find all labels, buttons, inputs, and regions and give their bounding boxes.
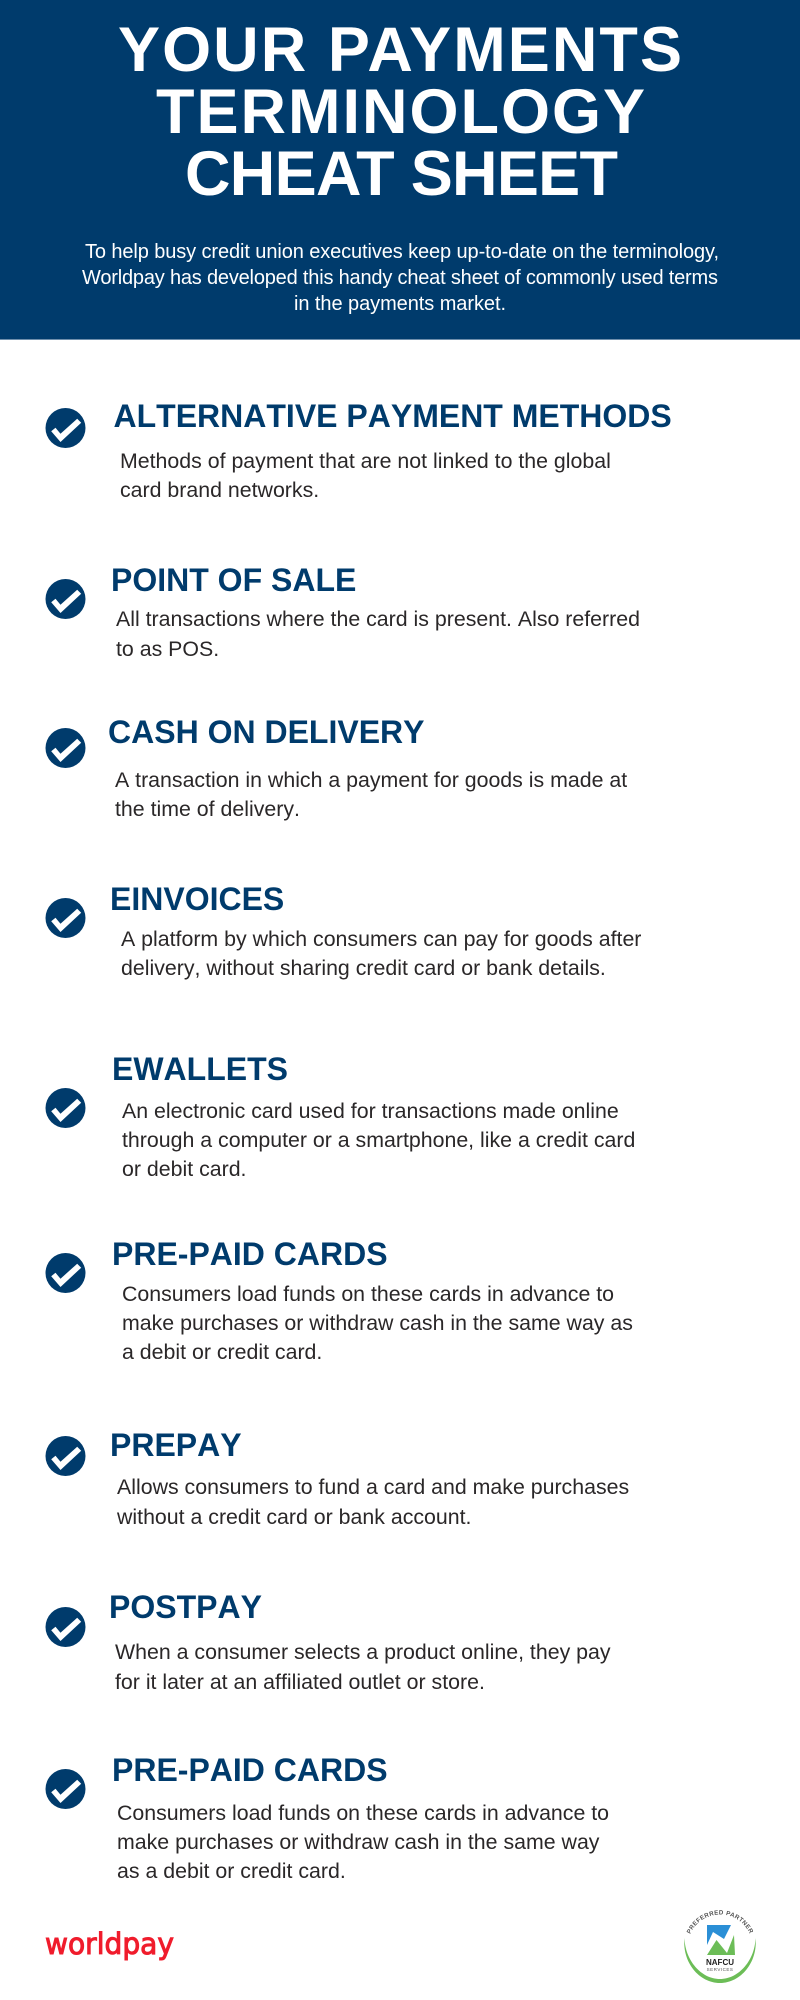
term: prepay: without a credit card or bank account. (116, 1505, 471, 1529)
term: point of sale (46, 562, 640, 661)
term: point of sale: All transactions where the card is present. Also referred (116, 607, 640, 631)
intro text: Worldpay has developed this handy cheat sheet of commonly used terms (82, 267, 718, 289)
term: einvoices: delivery, without sharing credit card or bank details. (121, 956, 606, 980)
term: pre-paid cards (second): PRE-PAID CARDS (112, 1752, 388, 1788)
term: pre-paid cards (second): make purchases or withdraw cash in the same way (117, 1830, 600, 1854)
NAFCU preferred partner badge (684, 1910, 756, 1983)
term: prepay (46, 1427, 629, 1529)
term: pre-paid cards (46, 1236, 633, 1364)
title: YOUR PAYMENTS (118, 15, 682, 85)
NAFCU preferred partner badge: SERVICES (707, 1967, 733, 1972)
term: alternative payment methods: ALTERNATIVE PAYMENT METHODS (114, 398, 672, 434)
term: ewallets: through a computer or a smartphone, like a credit card (122, 1128, 635, 1152)
title (118, 15, 682, 209)
term: alternative payment methods (46, 398, 672, 502)
term: ewallets (46, 1051, 635, 1181)
term: postpay (46, 1589, 611, 1694)
NAFCU preferred partner badge: NAFCU (706, 1958, 734, 1967)
intro text (82, 241, 719, 315)
header banner (0, 0, 800, 340)
term: alternative payment methods: Methods of payment that are not linked to the global (120, 449, 611, 473)
term: pre-paid cards: Consumers load funds on these cards in advance to (122, 1282, 614, 1306)
term: pre-paid cards: make purchases or withdraw cash in the same way as (122, 1311, 633, 1335)
term: einvoices: A platform by which consumers can pay for goods after (121, 927, 641, 951)
term: alternative payment methods: card brand networks. (120, 478, 319, 502)
term: point of sale: to as POS. (116, 637, 219, 661)
NAFCU preferred partner badge: PREFERRED PARTNER (686, 1910, 753, 1934)
worldpay logo: worldpay (45, 1927, 174, 1961)
term: cash on delivery (46, 714, 627, 821)
term: pre-paid cards (second) (46, 1752, 609, 1883)
term: einvoices (46, 881, 641, 980)
intro text: To help busy credit union executives keep up-to-date on the terminology, (85, 241, 719, 263)
term: prepay: PREPAY (110, 1427, 242, 1463)
term: pre-paid cards: a debit or credit card. (122, 1340, 322, 1364)
term: postpay: for it later at an affiliated outlet or store. (115, 1670, 485, 1694)
title: CHEAT SHEET (185, 139, 618, 209)
term: postpay: When a consumer selects a product online, they pay (115, 1640, 611, 1664)
term: einvoices: EINVOICES (110, 881, 284, 917)
title: TERMINOLOGY (156, 77, 645, 147)
term: ewallets: An electronic card used for transactions made online (122, 1099, 619, 1123)
intro text: in the payments market. (294, 293, 506, 315)
term: cash on delivery: A transaction in which a payment for goods is made at (115, 768, 627, 792)
term: postpay: POSTPAY (109, 1589, 262, 1625)
term: pre-paid cards (second): as a debit or credit card. (117, 1859, 346, 1883)
term: point of sale: POINT OF SALE (111, 562, 356, 598)
term: cash on delivery: the time of delivery. (115, 797, 300, 821)
term: ewallets: EWALLETS (112, 1051, 288, 1087)
term: cash on delivery: CASH ON DELIVERY (108, 714, 424, 750)
term: pre-paid cards: PRE-PAID CARDS (112, 1236, 388, 1272)
term: pre-paid cards (second): Consumers load funds on these cards in advance to (117, 1801, 609, 1825)
term: ewallets: or debit card. (122, 1157, 246, 1181)
term: prepay: Allows consumers to fund a card and make purchases (117, 1475, 629, 1499)
